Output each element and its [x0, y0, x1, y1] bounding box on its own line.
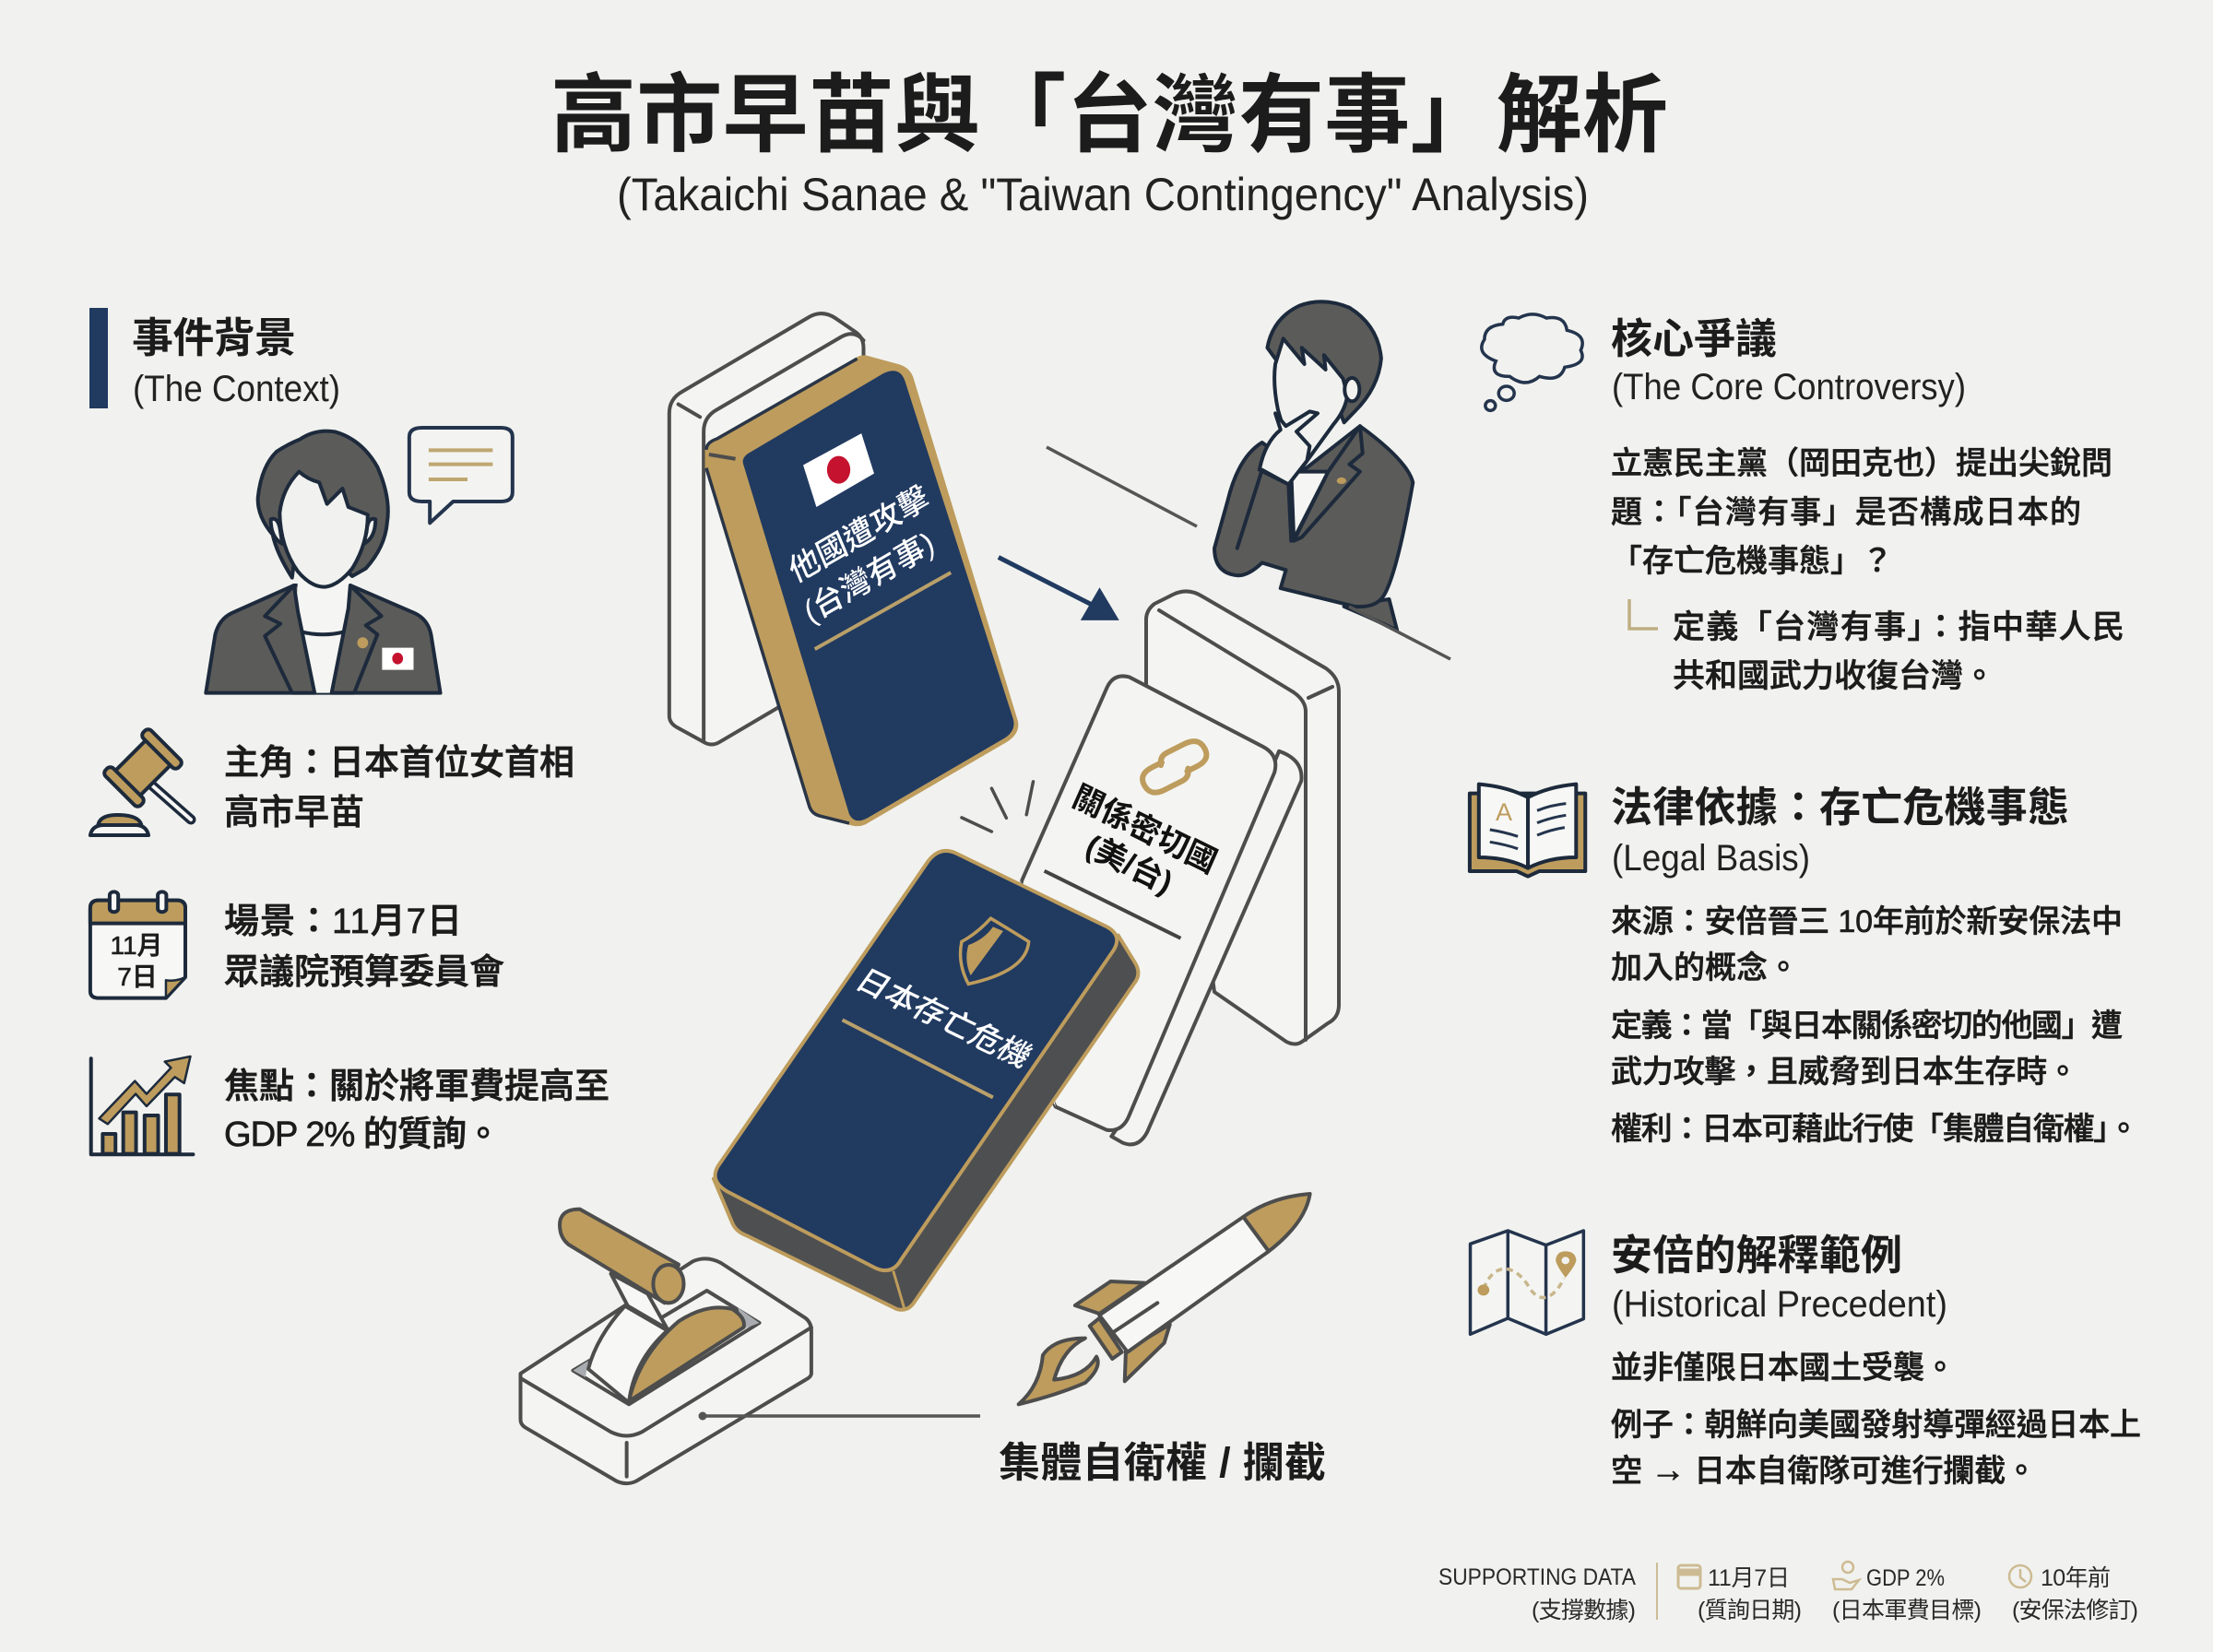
heading: legal basis: 法律依據：存亡危機事態 — [1611, 784, 2069, 831]
arrow: attack direction — [999, 557, 1119, 620]
icon: clock — [2009, 1565, 2031, 1587]
illustration: thinking politician — [1214, 301, 1413, 631]
footer label: SUPPORTING DATA — [1438, 1564, 1636, 1590]
text: definition — [1673, 609, 2124, 694]
data: gdp: GDP 2% — [1866, 1565, 1945, 1591]
text: definition: 共和國武力收復台灣。 — [1673, 658, 1995, 694]
icon: open book — [1470, 785, 1585, 877]
illustration: navy domino attack: (台灣有事) — [799, 525, 940, 631]
panel: context — [89, 308, 609, 1154]
text: protagonist: 高市早苗 — [224, 794, 364, 832]
illustration: ally domino: (美/台) — [1081, 828, 1178, 901]
panel: legal basis — [1470, 784, 2139, 1147]
panel: core controversy — [1482, 314, 2124, 694]
text: definition of survival crisis: 定義：當「與日本關係密切的他國」遭 — [1611, 1009, 2123, 1044]
illustration: ally domino: 關係密切國 — [1068, 779, 1222, 880]
data: date: 11月7日 — [1708, 1565, 1790, 1591]
icon: calendar: 11月 — [110, 931, 163, 960]
subtitle: (Takaichi Sanae & "Taiwan Contingency" Analysis) — [617, 169, 1589, 220]
text: setting — [224, 903, 504, 992]
illustration: navy domino attack — [706, 357, 1017, 825]
illustration: back domino right — [1146, 591, 1339, 1044]
icon: calendar — [90, 891, 185, 998]
icon: thought cloud — [1482, 314, 1582, 410]
text: example: 例子：朝鮮向美國發射導彈經過日本上 — [1611, 1408, 2141, 1443]
illustration: Japan survival domino — [714, 851, 1138, 1310]
text: protagonist — [224, 744, 574, 832]
icon: speech bubble — [409, 428, 513, 523]
text: focus: 焦點：關於將軍費提高至 — [224, 1068, 609, 1106]
panel: historical precedent — [1471, 1231, 2141, 1490]
icon: folded map — [1471, 1231, 1583, 1334]
text: source: 來源：安倍晉三 10年前於新安保法中 — [1611, 904, 2123, 939]
heading: context: 事件背景 — [132, 314, 296, 361]
text: definition: 定義「台灣有事」：指中華人民 — [1673, 609, 2124, 645]
accent bar — [89, 308, 108, 408]
illustration: lever switch — [520, 1210, 811, 1483]
icon: calendar: 7日 — [117, 962, 158, 991]
text: source: 加入的概念。 — [1611, 950, 1799, 985]
icon: rising chart — [91, 1056, 193, 1154]
icon: gavel — [90, 727, 191, 835]
data: years: (安保法修訂) — [2012, 1598, 2138, 1623]
text: protagonist: 主角：日本首位女首相 — [224, 744, 574, 783]
text: question — [1611, 446, 2112, 579]
text: question: 「存亡危機事態」？ — [1611, 544, 1893, 579]
data: gdp — [1832, 1565, 1982, 1623]
text: question: 立憲民主黨（岡田克也）提出尖銳問 — [1611, 446, 2112, 481]
title: 高市早苗與「台灣有事」解析 — [550, 67, 1668, 163]
data: date — [1698, 1565, 1802, 1623]
callout line with dot — [699, 1412, 980, 1420]
heading english: context: (The Context) — [133, 369, 340, 409]
text: example: 空 → 日本自衛隊可進行攔截。 — [1611, 1451, 2037, 1490]
text: definition of survival crisis — [1611, 1009, 2123, 1090]
illustration: navy domino attack: 他國遭攻擊 — [785, 479, 934, 590]
heading: core controversy: 核心爭議 — [1611, 315, 1777, 362]
illustration: Japan survival domino: 日本存亡危機 — [849, 963, 1038, 1074]
icon: open book: A — [1496, 798, 1512, 826]
illustration: back domino left — [669, 313, 863, 744]
text: not only homeland: 並非僅限日本國土受襲。 — [1611, 1351, 1956, 1386]
footer label: (支撐數據) — [1532, 1598, 1636, 1623]
text: definition of survival crisis: 武力攻擊，且威脅到日本生存時。 — [1611, 1055, 2078, 1090]
base line — [1349, 607, 1450, 659]
bracket connector — [1629, 599, 1658, 629]
footer: supporting data — [1438, 1562, 2138, 1623]
pointer line — [1047, 447, 1197, 526]
text: question: 題：「台灣有事」是否構成日本的 — [1611, 495, 2081, 530]
heading: historical precedent: 安倍的解釋範例 — [1611, 1232, 1902, 1279]
text: focus: GDP 2% 的質詢。 — [224, 1115, 501, 1154]
heading english: core controversy: (The Core Controversy) — [1612, 367, 1966, 407]
heading english: legal basis: (Legal Basis) — [1612, 838, 1810, 879]
text: focus — [224, 1068, 609, 1154]
icon: small calendar — [1678, 1565, 1700, 1588]
data: gdp: (日本軍費目標) — [1832, 1598, 1982, 1623]
footer label — [1438, 1564, 1636, 1623]
icon: speaking politician — [206, 431, 441, 693]
illustration: ally domino — [962, 676, 1302, 1144]
heading english: historical precedent: (Historical Precedent) — [1612, 1284, 1947, 1325]
text: right: 權利：日本可藉此行使「集體自衛權」。 — [1611, 1112, 2139, 1147]
data: years — [2012, 1565, 2138, 1623]
icon: hand with coin — [1833, 1562, 1859, 1589]
data: date: (質詢日期) — [1698, 1598, 1802, 1623]
text: setting: 眾議院預算委員會 — [224, 953, 504, 992]
label: collective self defence: 集體自衛權 / 攔截 — [999, 1439, 1326, 1486]
data: years: 10年前 — [2041, 1565, 2111, 1591]
text: source — [1611, 904, 2123, 985]
text: example — [1611, 1408, 2141, 1490]
text: setting: 場景：11月7日 — [224, 903, 462, 941]
illustration: missile — [1019, 1194, 1310, 1404]
